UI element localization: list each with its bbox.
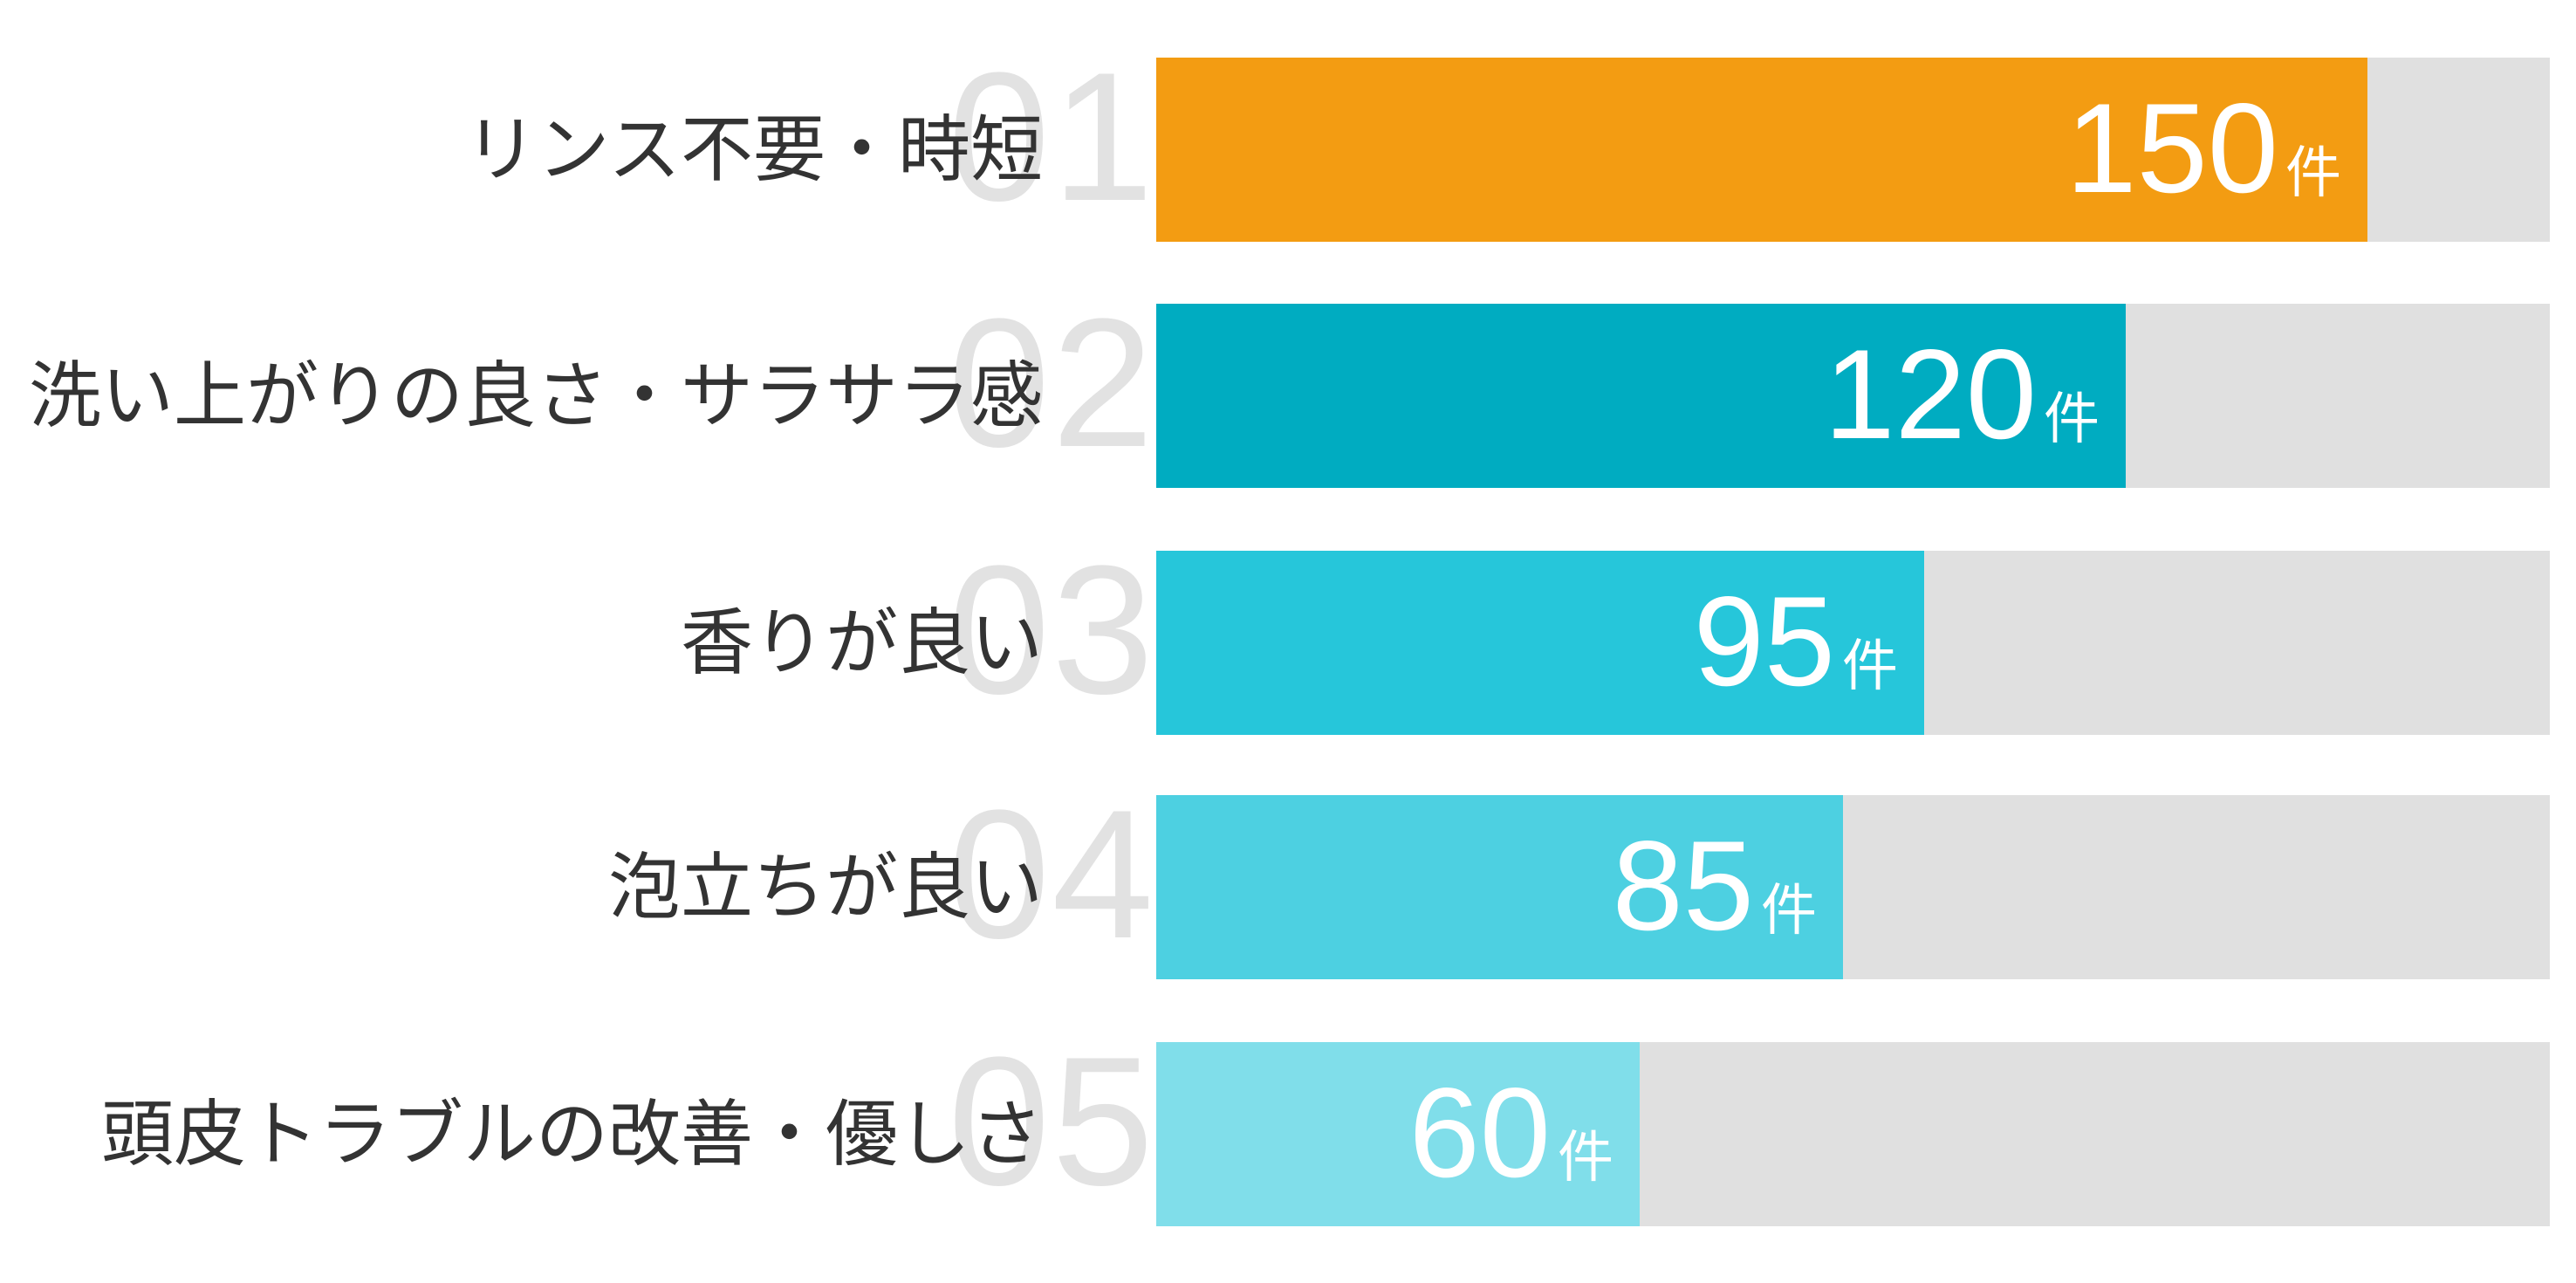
rank number 04: 04 (948, 772, 1155, 977)
bar track (1156, 58, 2550, 242)
rank number 01: 01 (948, 34, 1155, 239)
label: 香りが良い (681, 602, 1043, 683)
label: リンス不要・時短 (465, 109, 1043, 190)
rank number 02: 02 (948, 280, 1155, 485)
bar fill 150 (1156, 58, 2367, 242)
row 1: リンス不要・時短 (465, 34, 2550, 242)
label: 泡立ちが良い (608, 847, 1043, 928)
value: 120件 (1824, 323, 2100, 465)
bar fill 95 (1156, 551, 1924, 735)
row 3: 香りが良い (681, 527, 2550, 735)
row 5: 頭皮トラブルの改善・優しさ (101, 1019, 2550, 1226)
label: 頭皮トラブルの改善・優しさ (101, 1094, 1043, 1175)
bar track (1156, 304, 2550, 488)
bar fill 120 (1156, 304, 2126, 488)
value: 95件 (1694, 570, 1898, 712)
bar track (1156, 795, 2550, 979)
value: 150件 (2066, 77, 2341, 219)
bar fill 60 (1156, 1042, 1640, 1226)
rank number 05: 05 (948, 1019, 1155, 1224)
rank number 03: 03 (948, 527, 1155, 732)
row 2: 洗い上がりの良さ・サラサラ感 (29, 280, 2550, 488)
bar track (1156, 1042, 2550, 1226)
value: 85件 (1613, 814, 1817, 957)
row 4: 泡立ちが良い (608, 772, 2550, 979)
bar track (1156, 551, 2550, 735)
value: 60件 (1409, 1061, 1613, 1204)
bar fill 85 (1156, 795, 1843, 979)
label: 洗い上がりの良さ・サラサラ感 (29, 355, 1043, 436)
